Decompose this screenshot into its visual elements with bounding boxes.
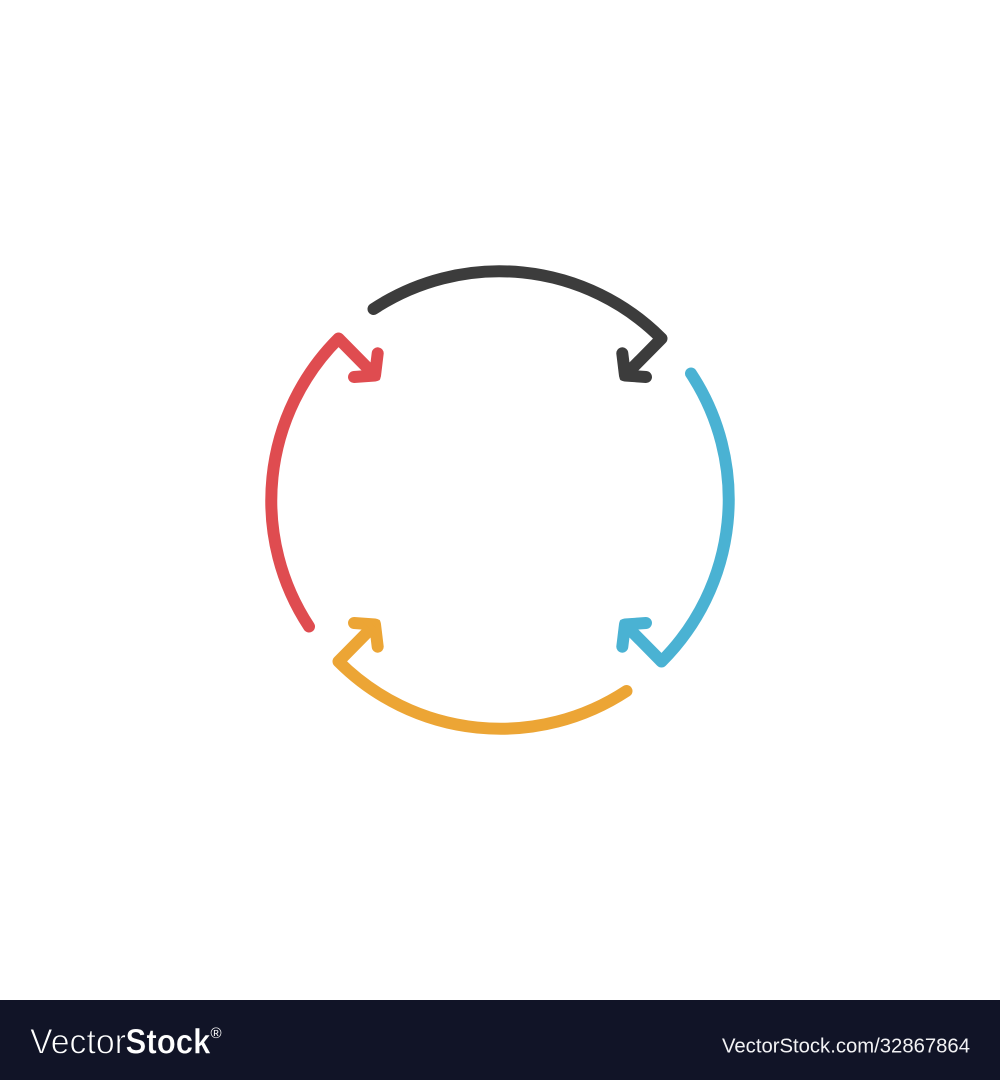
footer logo wordmark: ® xyxy=(210,1025,222,1042)
arrow: blue right xyxy=(620,374,729,662)
footer logo wordmark: Stock xyxy=(126,1022,211,1062)
footer logo wordmark xyxy=(30,1022,222,1062)
footer bar xyxy=(0,1000,1000,1080)
footer logo wordmark: Vector xyxy=(30,1022,126,1062)
arrow: red left xyxy=(271,338,380,626)
cycle diagram xyxy=(271,271,729,729)
footer image id text: VectorStock.com/32867864 xyxy=(722,1036,970,1058)
arrow: dark grey top xyxy=(374,271,662,380)
arrow: orange bottom xyxy=(338,620,626,729)
